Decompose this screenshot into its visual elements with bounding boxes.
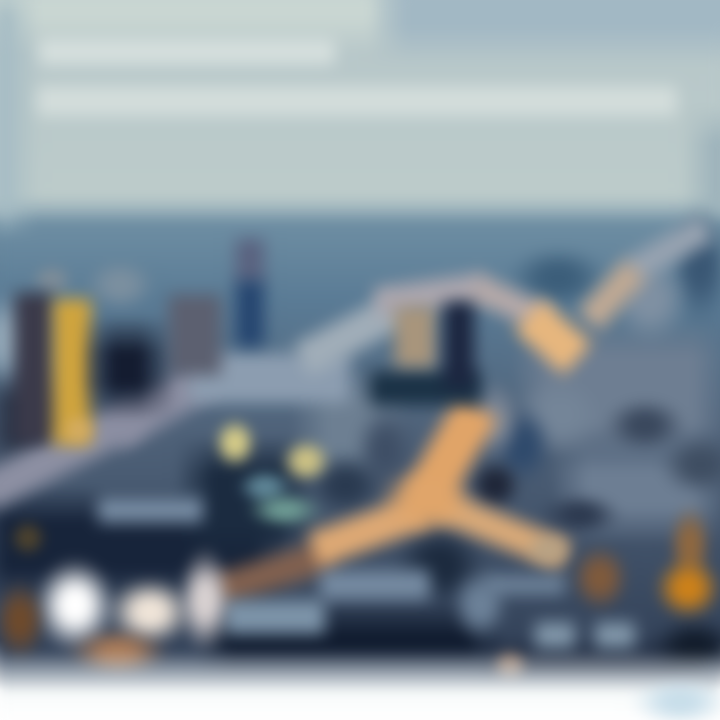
lights: yellow glowing rooftops (210, 416, 334, 487)
road: orange junction (212, 396, 580, 607)
tower: orange spire (652, 506, 720, 622)
road highlight: orange bend (506, 292, 599, 382)
rooftop: teal (237, 466, 320, 531)
footer: white band (0, 650, 720, 720)
brown foreground blocks (0, 520, 628, 681)
road: grey winding overpass (0, 214, 719, 516)
tower: dark block (77, 315, 177, 421)
title band: illegible heading lines (34, 37, 680, 120)
tower: blue skyscraper (228, 233, 272, 356)
towers: central tan and dark pair (360, 290, 489, 418)
tower: grey brown (163, 288, 230, 384)
tower: yellow skyscraper (4, 266, 102, 456)
white glow: foreground buildings (33, 546, 234, 654)
city texture: dark masses and mottled rooftops (0, 210, 720, 676)
rooftops: pale blue-grey slabs (88, 488, 644, 658)
sky tones (0, 0, 720, 234)
